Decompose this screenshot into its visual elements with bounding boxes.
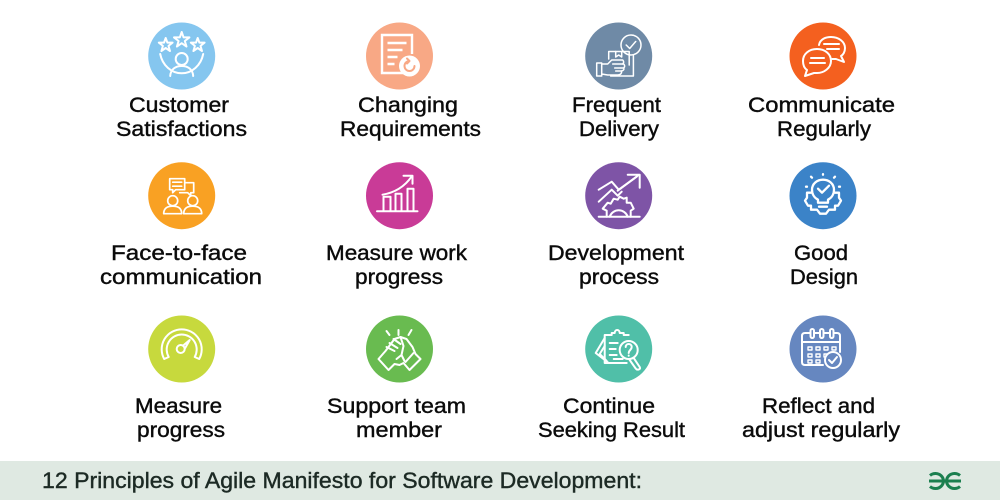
label: Satisfactions xyxy=(116,118,247,141)
label: process xyxy=(579,266,659,289)
label: Good xyxy=(794,242,848,265)
principle: Communicate Regularly xyxy=(748,22,895,141)
label xyxy=(538,395,685,442)
principle: Frequent Delivery xyxy=(572,22,661,141)
icon: clipboard with magnifier xyxy=(585,316,652,382)
label: Continue xyxy=(563,395,655,418)
icon: rising bar chart xyxy=(366,162,433,229)
label xyxy=(742,395,901,442)
label: Delivery xyxy=(579,118,660,141)
label xyxy=(748,94,895,141)
icon: gear with arrow xyxy=(585,162,652,229)
icon: speech bubbles xyxy=(790,22,856,90)
principle: Customer Satisfactions xyxy=(116,22,247,141)
icon: light bulb in gear xyxy=(790,162,856,229)
principle: Measure work progress xyxy=(326,162,468,289)
icon: GfG logo xyxy=(929,474,961,488)
footer title: 12 Principles of Agile Manifesto for Software Development: xyxy=(42,468,642,493)
label xyxy=(116,94,247,141)
principle: Support team member xyxy=(327,316,466,442)
label: progress xyxy=(137,419,225,442)
label: Reflect and xyxy=(762,395,875,418)
label: progress xyxy=(355,266,443,289)
principle: Continue Seeking Result xyxy=(538,316,685,442)
label: Support team xyxy=(327,395,466,418)
icon: speedometer gauge xyxy=(148,316,215,382)
label: Communicate xyxy=(748,94,895,117)
label: Measure work xyxy=(326,242,468,265)
principle: Measure progress xyxy=(135,316,225,442)
icon: calendar with check xyxy=(790,316,856,382)
label xyxy=(100,242,262,289)
principle: Reflect and adjust regularly xyxy=(742,316,901,442)
label: Design xyxy=(790,266,858,289)
label xyxy=(548,242,684,289)
label xyxy=(340,94,481,141)
label: Regularly xyxy=(777,118,872,141)
label xyxy=(135,395,225,442)
icon: document with refresh xyxy=(366,22,433,90)
label: Changing xyxy=(358,94,458,117)
label: Measure xyxy=(135,395,222,418)
principle: Changing Requirements xyxy=(340,22,481,141)
label xyxy=(327,395,466,442)
label: member xyxy=(356,419,442,442)
label: Seeking Result xyxy=(538,419,685,442)
label: communication xyxy=(100,266,262,289)
label: Development xyxy=(548,242,684,265)
icon: high five hands xyxy=(366,316,433,382)
footer band xyxy=(0,461,1000,500)
label: adjust regularly xyxy=(742,419,901,442)
principle: Face-to-face communication xyxy=(100,162,262,289)
label xyxy=(790,242,858,289)
principle: Development process xyxy=(548,162,684,289)
label: Frequent xyxy=(572,94,661,117)
label xyxy=(572,94,661,141)
label xyxy=(326,242,468,289)
icon: hand with box and check xyxy=(585,22,652,90)
icon: customer with stars xyxy=(148,22,215,90)
icon: two people talking xyxy=(148,162,215,229)
label: Customer xyxy=(129,94,229,117)
principle: Good Design xyxy=(790,162,858,289)
label: Face-to-face xyxy=(111,242,247,265)
label: Requirements xyxy=(340,118,481,141)
